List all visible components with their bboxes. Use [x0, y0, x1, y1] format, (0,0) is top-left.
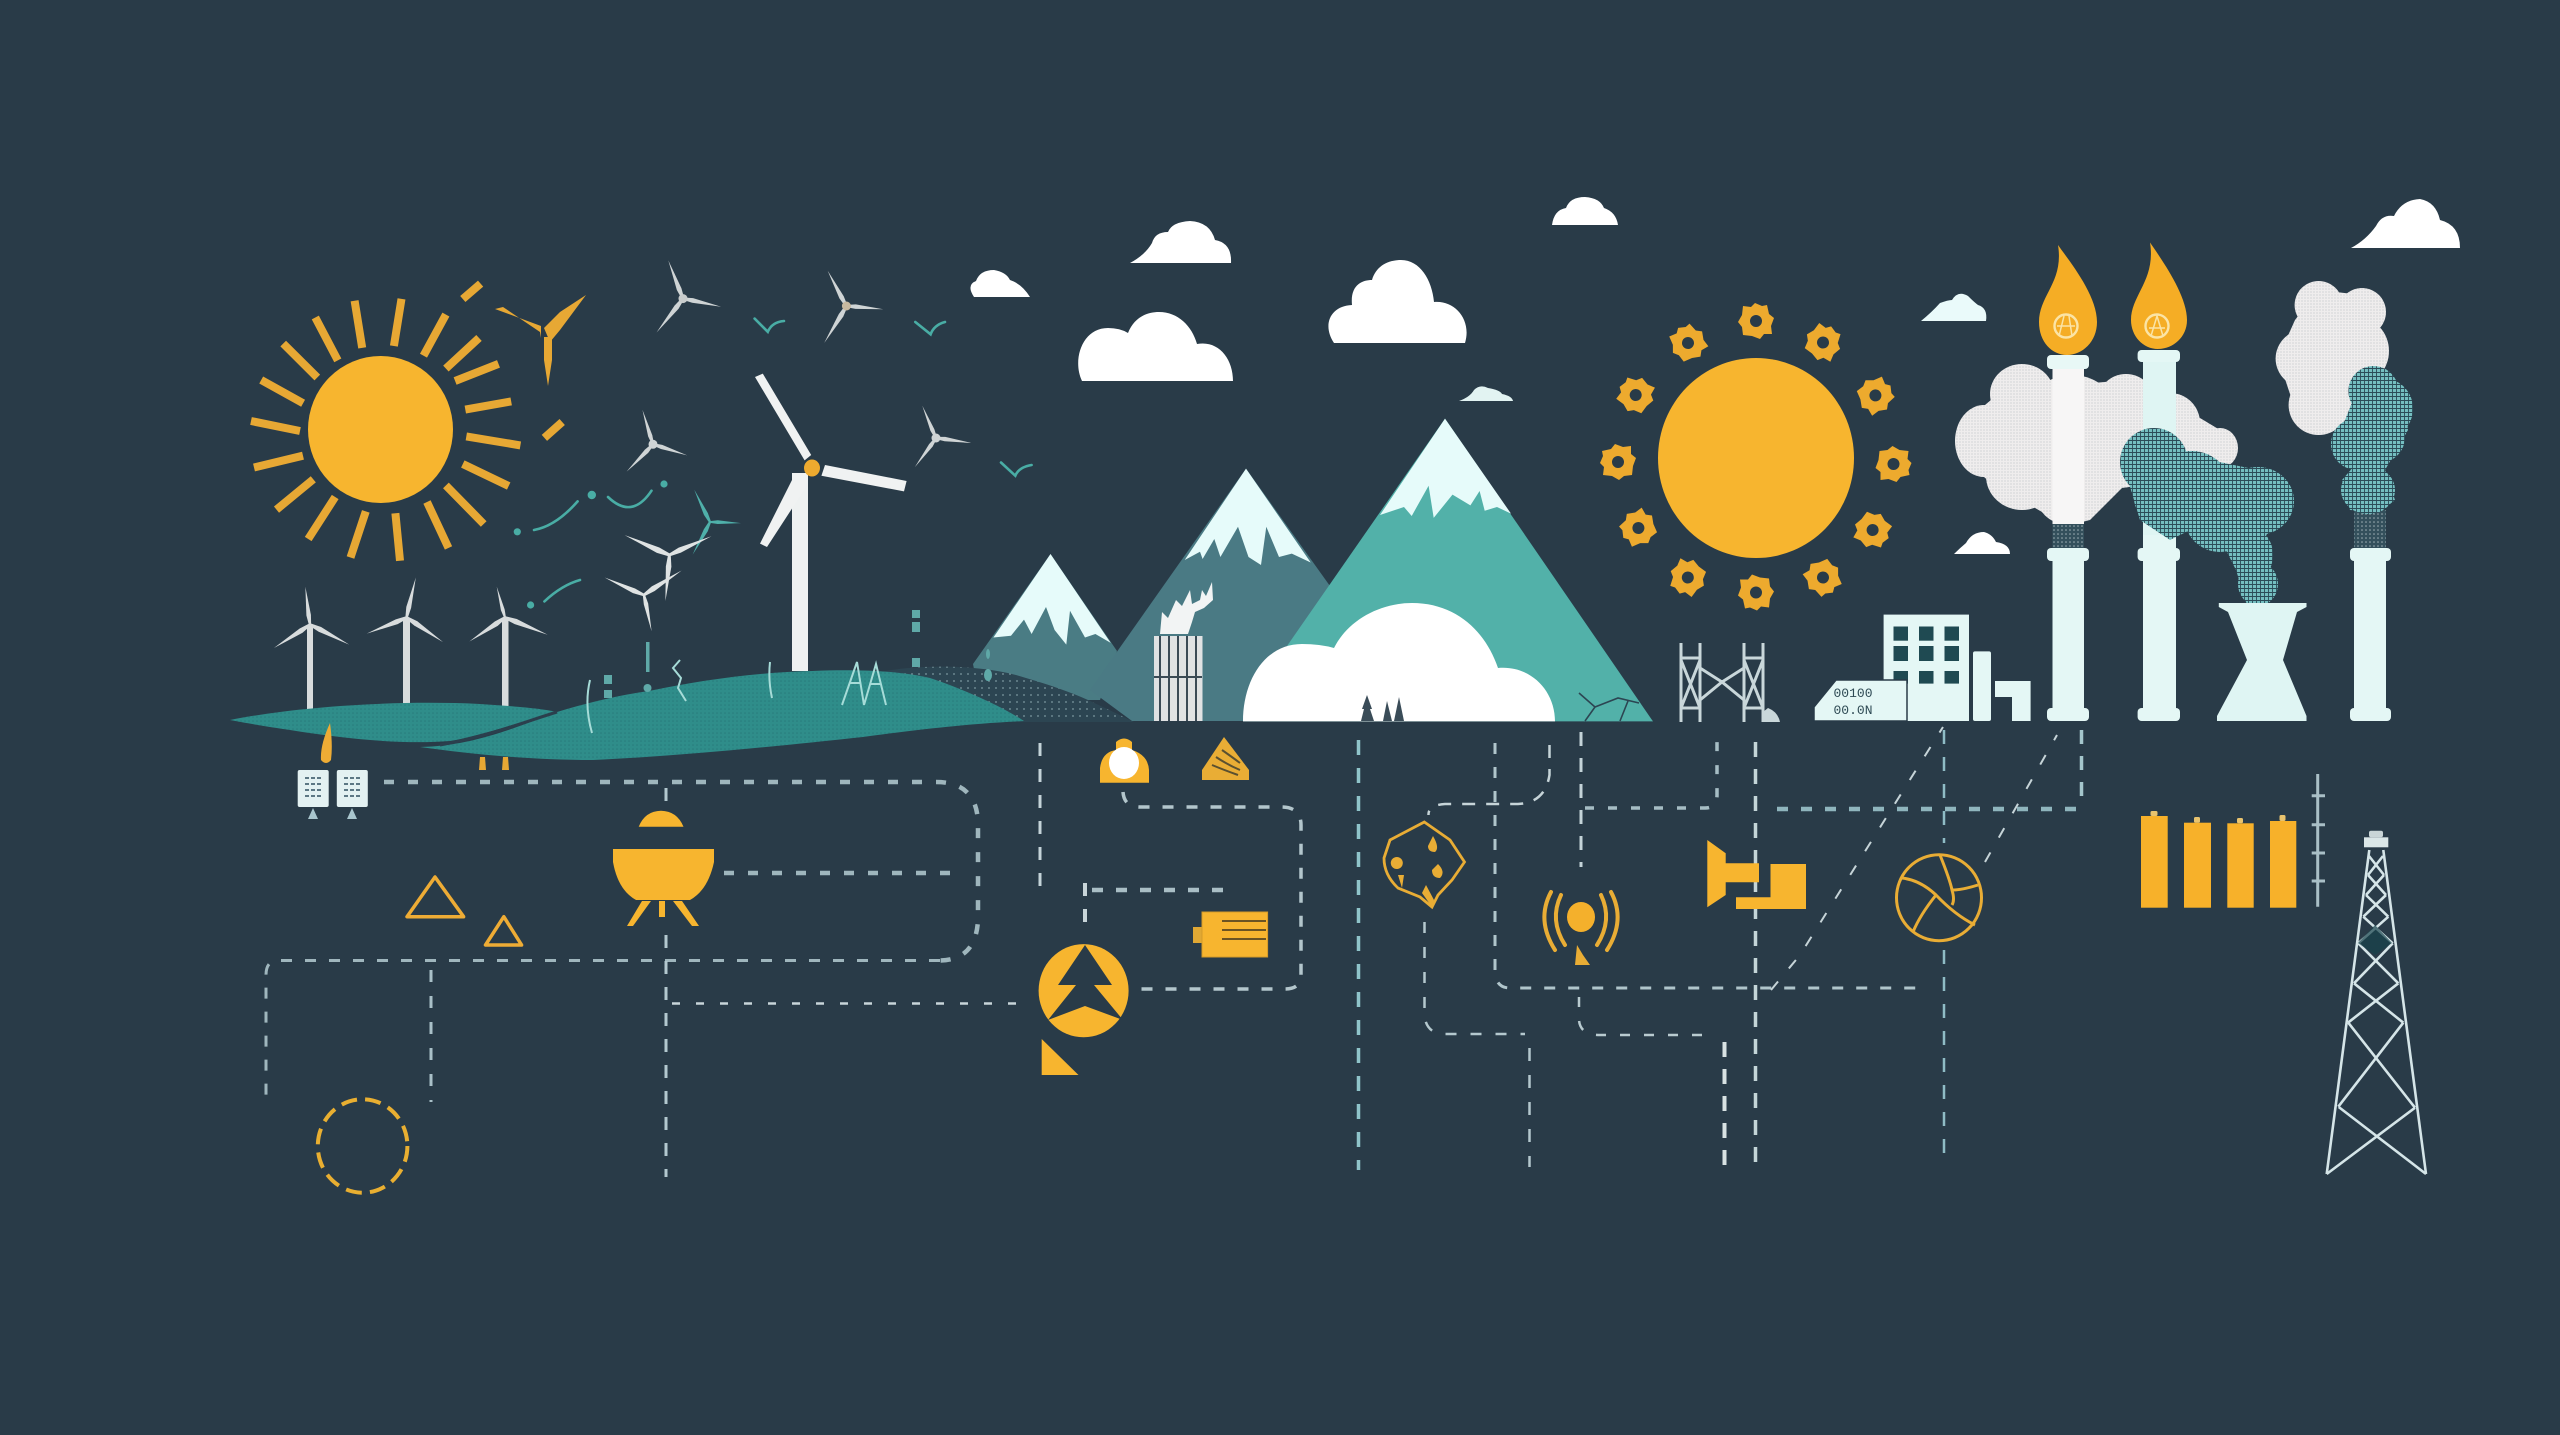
teal smoke plume: [2120, 428, 2294, 608]
office building and truck: 00.0N: [1833, 703, 1873, 718]
yellow wind turbine: [495, 295, 586, 386]
card icon: [1193, 912, 1268, 957]
mountain: large: [1243, 419, 1653, 721]
leaf blob icon: [1384, 822, 1464, 907]
large white cloud with trees: [1243, 603, 1555, 721]
dashed network lines: [266, 727, 2082, 1177]
globe icon: [1896, 855, 1982, 941]
hill details: teal markers and mini towers: [587, 610, 992, 733]
row of three wind turbines: [273, 577, 549, 709]
small sky wind turbines: [603, 260, 972, 632]
left sun with rays: [251, 284, 562, 561]
interlocking block icon: [1707, 840, 1806, 909]
big wind turbine: [755, 374, 907, 671]
cooker icon: [613, 811, 714, 926]
transmission tower: [2327, 831, 2426, 1174]
right sun with gear ring: [1600, 303, 1912, 610]
dashed yellow circle: [318, 1099, 407, 1193]
bridge: [1681, 643, 1780, 722]
battery bars: [2141, 811, 2296, 908]
teal wind trail dots and birds: [514, 319, 1032, 609]
triangle outlines: [407, 877, 522, 945]
clouds: [970, 197, 2460, 554]
signal icon: [1544, 892, 1618, 965]
office building and truck: [1814, 615, 2031, 721]
small yellow posts: [479, 757, 509, 770]
cooling tower: [2217, 603, 2306, 721]
mountain: small: [973, 554, 1117, 700]
white smoke plume from stacks: [1955, 364, 2238, 526]
miner helmet icon: [1100, 738, 1149, 783]
arrow disc icon: [1039, 944, 1129, 1075]
factory tower with smoke: [1154, 582, 1213, 721]
mountain: middle: [1090, 469, 1340, 721]
white smoke plume right: [2276, 281, 2389, 435]
smokestack with flame 1: [2039, 245, 2097, 721]
solar panels with flame: [298, 723, 368, 819]
office building and truck: 00100: [1833, 686, 1873, 701]
green hills: [230, 670, 1024, 760]
dark dotted hill: [880, 667, 1134, 722]
smokestack with flame 2: [2131, 242, 2187, 721]
smokestack 3 with teal smoke: [2331, 366, 2413, 721]
level gauge: [2312, 774, 2325, 907]
layered leaf house icon: [1202, 737, 1249, 780]
